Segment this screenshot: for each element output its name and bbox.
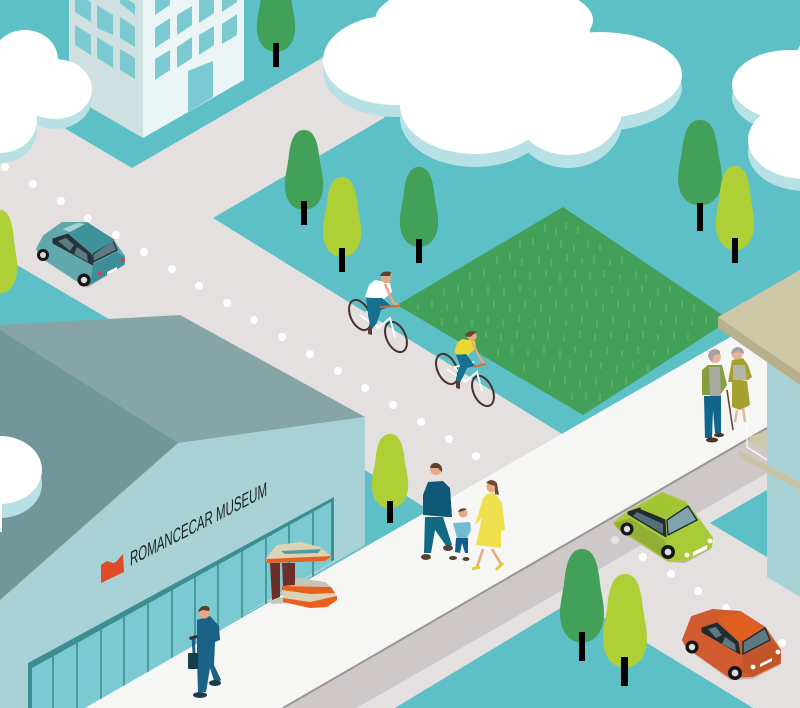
father (421, 463, 453, 560)
car: teal (37, 222, 125, 288)
cloud: top left (0, 30, 92, 163)
family walking (421, 463, 505, 570)
cloud: top centre (323, 0, 682, 168)
roof eave (718, 317, 800, 385)
elderly couple (702, 347, 752, 442)
balcony beam (738, 450, 800, 490)
tree (372, 434, 408, 523)
main road with branch (0, 40, 562, 512)
cyclist with yellow shirt (432, 331, 498, 410)
apartment building (718, 270, 800, 597)
balcony floor (749, 431, 766, 450)
cloud top (323, 0, 682, 155)
tree (400, 167, 438, 263)
building right wall (143, 0, 244, 138)
cyclist with white shirt (345, 272, 411, 356)
building windows (75, 0, 237, 80)
white sidewalk (85, 316, 767, 708)
road centre dots (1, 163, 786, 647)
window mullions (53, 512, 313, 708)
office building (69, 0, 244, 138)
tree (285, 130, 323, 225)
elderly man (702, 349, 733, 442)
cloud: over museum (0, 436, 42, 532)
museum logo (101, 554, 124, 583)
balcony rail (747, 410, 767, 460)
dot on mauve road (611, 536, 619, 544)
apartment wall (767, 345, 800, 597)
car: green (614, 493, 712, 563)
teal lawn bottom (395, 600, 753, 708)
cloud shadow (323, 27, 682, 168)
museum window frame (28, 497, 334, 708)
mother (472, 480, 505, 570)
roof top (718, 270, 800, 373)
museum glass (32, 502, 331, 708)
museum wall (0, 417, 365, 708)
field of grass (397, 207, 730, 415)
museum light roof (0, 315, 365, 443)
sidewalk edge (283, 428, 767, 708)
building left wall (69, 0, 143, 138)
tree (560, 549, 604, 661)
car: orange (683, 610, 780, 680)
tree (323, 177, 361, 272)
person: businessman (188, 606, 221, 698)
mauve service road (283, 429, 767, 708)
teal lawn by the apartment (710, 490, 767, 557)
tree (257, 0, 295, 67)
lower right road (356, 473, 800, 708)
child (449, 508, 471, 561)
museum dark roof (0, 330, 178, 600)
tree (0, 210, 17, 293)
cloud: top right (732, 35, 800, 191)
museum name: ROMANCECAR MUSEUM (130, 478, 267, 571)
tree (603, 574, 647, 686)
tree (678, 120, 722, 231)
building door (188, 61, 213, 112)
tree (716, 166, 754, 263)
romancecar nose model (266, 542, 337, 608)
elderly woman (728, 347, 752, 422)
museum building (0, 315, 365, 708)
